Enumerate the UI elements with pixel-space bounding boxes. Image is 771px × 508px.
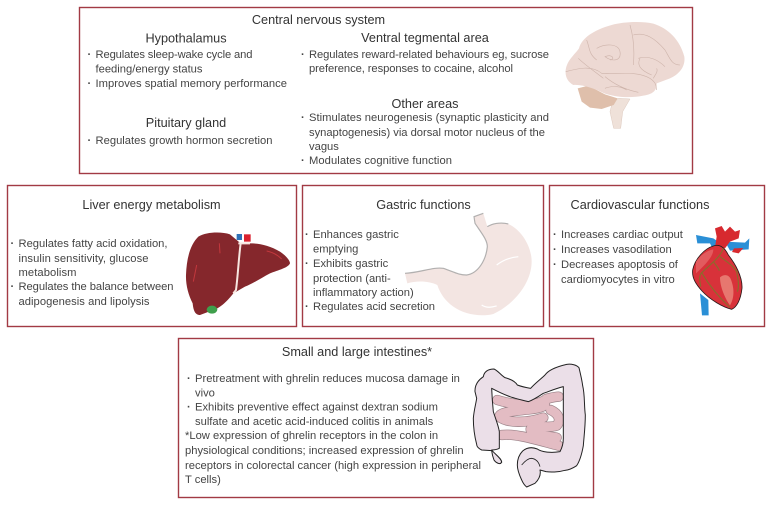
text block: liver functions: ·	[10, 281, 14, 293]
text block: hypothalamus: Hypothalamus	[145, 32, 227, 46]
text block: cardiovascular list: Increases vasodilation	[561, 244, 672, 256]
panel: cardiovascular functions	[550, 186, 764, 326]
text block: gastric list: ·	[305, 258, 309, 270]
text block: intestines list: vivo	[195, 388, 215, 400]
text block: hypothalamus: ·	[88, 49, 91, 61]
text block: intestines list: ·	[187, 373, 191, 385]
text block: other areas: synaptogenesis) via dorsal motor nucleus of the	[309, 127, 545, 139]
text block: gastric list: protection (anti-	[313, 273, 391, 285]
text block: gastric list	[305, 229, 435, 313]
text block: liver functions: Regulates the balance between	[18, 281, 174, 293]
text block: liver functions: Regulates fatty acid oxidation,	[18, 238, 168, 250]
heading: cardiovascular functions: Cardiovascular functions	[571, 198, 709, 212]
text block: intestines list: Pretreatment with ghrelin reduces mucosa damage in	[195, 373, 460, 385]
panel: central nervous system	[80, 8, 692, 174]
heading: central nervous system: Central nervous system	[252, 13, 385, 27]
text block: intestines list: sulfate and acetic acid-induced colitis in animals	[195, 416, 434, 428]
text block: intestines list	[185, 373, 481, 486]
text block: gastric list: inflammatory action)	[313, 287, 414, 299]
text block: other areas: Stimulates neurogenesis (synaptic plasticity and	[309, 112, 549, 124]
text block: other areas: ·	[301, 112, 305, 124]
text block: other areas: vagus	[309, 141, 339, 153]
panel: liver energy metabolism	[8, 186, 296, 326]
text block: intestines list: physiological conditions; increased expression of ghrelin	[185, 445, 464, 457]
text block: liver functions: insulin sensitivity, glucose	[18, 253, 148, 265]
text block: liver functions	[10, 238, 174, 308]
text block: ventral tegmental area	[301, 31, 549, 75]
heading: small and large intestines: Small and large intestines*	[282, 345, 432, 359]
text block: hypothalamus: Improves spatial memory performance	[96, 78, 287, 90]
text block: cardiovascular list: cardiomyocytes in vitro	[561, 274, 675, 286]
text block: hypothalamus	[88, 32, 287, 90]
text block: gastric list: emptying	[313, 244, 358, 256]
text block: intestines list: receptors in colorectal cancer (high expression in peripheral	[185, 460, 481, 472]
text block: other areas: ·	[301, 155, 305, 167]
text block: pituitary gland: Regulates growth hormon secretion	[96, 135, 272, 147]
heading: gastric functions: Gastric functions	[376, 198, 471, 212]
text block: ventral tegmental area: Ventral tegmental area	[361, 31, 490, 45]
text block: ventral tegmental area: Regulates reward-related behaviours eg, sucrose	[309, 49, 549, 61]
text block: gastric list: Regulates acid secretion	[313, 301, 435, 313]
text block: gastric list: ·	[305, 301, 309, 313]
text block: intestines list: Exhibits preventive effect against dextran sodium	[195, 402, 438, 414]
text block: hypothalamus: ·	[88, 78, 91, 90]
text block: cardiovascular list	[553, 229, 684, 286]
text block: cardiovascular list: Increases cardiac output	[561, 229, 684, 241]
text block: cardiovascular list: Decreases apoptosis of	[561, 259, 679, 271]
icon: liver	[186, 233, 290, 315]
text block: hypothalamus: Regulates sleep-wake cycle and	[96, 49, 252, 61]
text block: pituitary gland: Pituitary gland	[146, 116, 226, 130]
text block: pituitary gland	[88, 116, 272, 147]
panel: gastric functions	[302, 186, 544, 326]
text block: intestines list: *Low expression of ghrelin receptors in the colon in	[185, 430, 438, 442]
icon: heart	[693, 226, 749, 315]
text block: other areas: Other areas	[392, 97, 458, 111]
text block: liver functions: adipogenesis and lipolysis	[18, 296, 150, 308]
text block: cardiovascular list: ·	[553, 229, 557, 241]
text block: ventral tegmental area: ·	[301, 49, 305, 61]
text block: gastric list: Enhances gastric	[313, 229, 399, 241]
text block: ventral tegmental area: preference, responses to cocaine, alcohol	[309, 63, 513, 75]
text block: hypothalamus: feeding/energy status	[96, 64, 203, 76]
text block: cardiovascular list: ·	[553, 244, 557, 256]
text block: other areas: Modulates cognitive function	[309, 155, 452, 167]
text block: other areas	[301, 97, 549, 167]
heading: liver energy metabolism: Liver energy metabolism	[82, 198, 221, 212]
text block: liver functions: metabolism	[18, 267, 76, 279]
icon: intestines	[473, 364, 585, 487]
text block: gastric list: Exhibits gastric	[313, 258, 389, 270]
icon: brain	[566, 22, 684, 128]
text block: intestines list: T cells)	[185, 474, 221, 486]
icon: stomach	[405, 213, 532, 315]
text block: cardiovascular list: ·	[553, 259, 557, 271]
text block: liver functions: ·	[10, 238, 14, 250]
panel: small and large intestines	[178, 338, 594, 498]
text block: gastric list: ·	[305, 229, 309, 241]
text block: intestines list: ·	[187, 402, 191, 414]
text block: pituitary gland: ·	[88, 135, 91, 147]
